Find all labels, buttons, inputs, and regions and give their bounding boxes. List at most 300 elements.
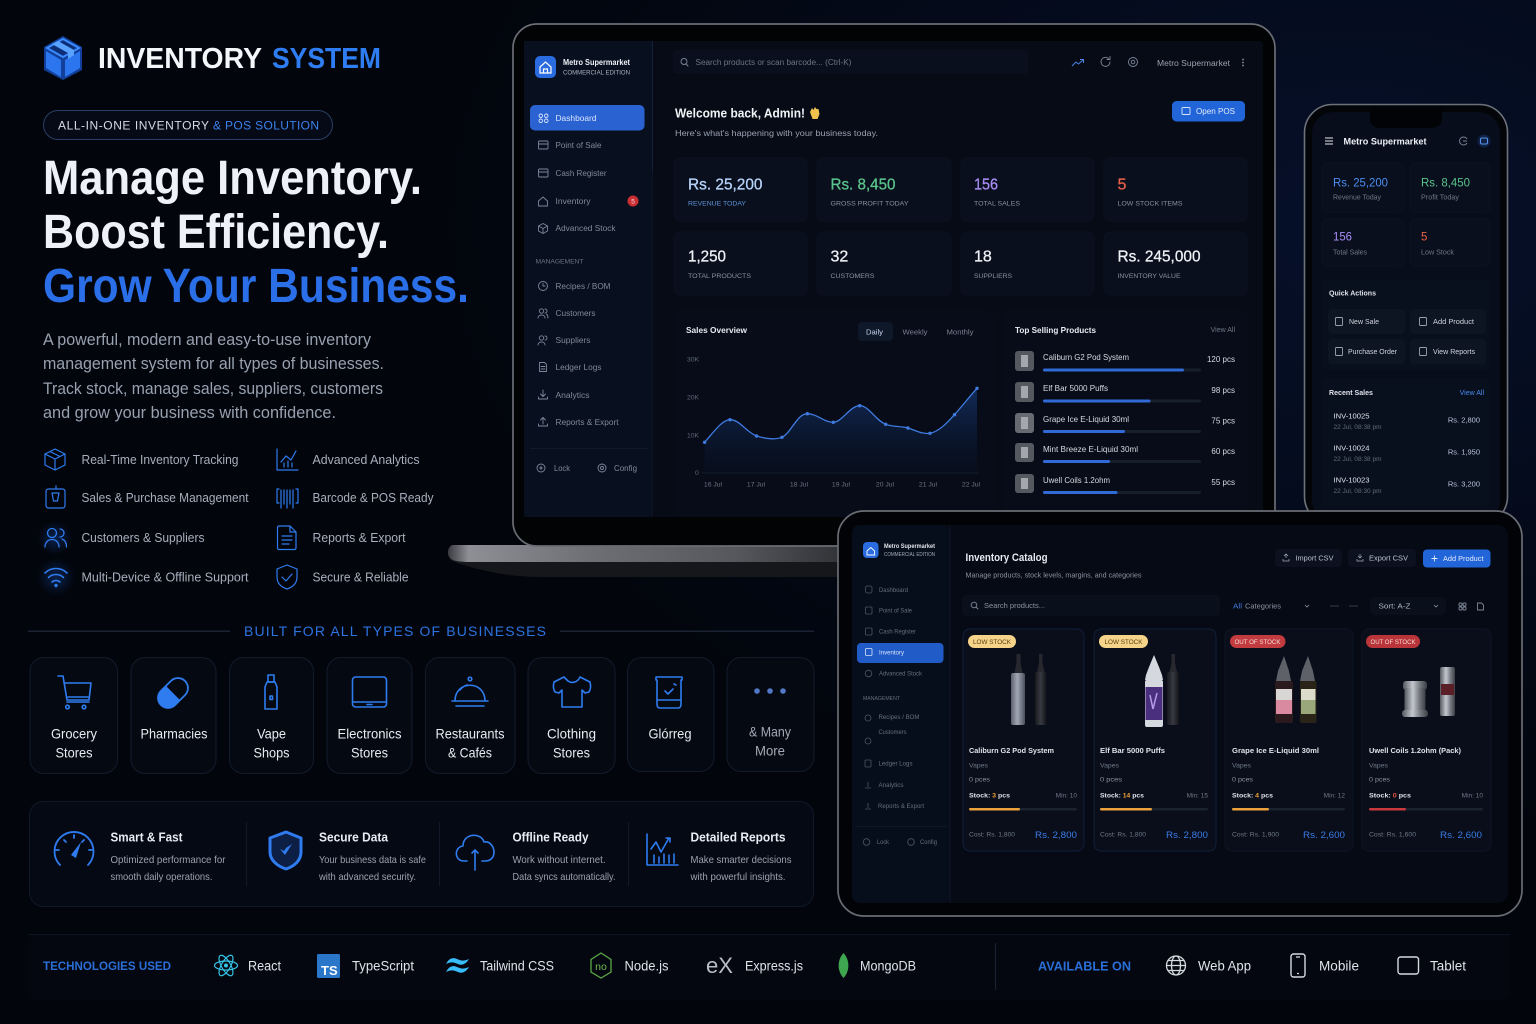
sales overview chart	[674, 310, 994, 517]
stat: total sales: 156	[974, 176, 998, 194]
phone stat: profit	[1410, 163, 1490, 212]
phone stat cards	[1322, 163, 1490, 266]
sales overview chart: 10K	[687, 432, 700, 440]
sale row 10024: INV-10024	[1334, 446, 1370, 452]
tablet menu items: Recipes / BOM	[878, 714, 920, 721]
product row: Grape Ice	[1015, 413, 1235, 433]
product card: Elf Bar: Cost: Rs. 1,800	[1100, 832, 1146, 838]
stat: total products: TOTAL PRODUCTS	[688, 273, 752, 280]
headline	[43, 152, 469, 313]
feature: inventory tracking	[45, 449, 238, 470]
top search bar	[673, 50, 1028, 74]
card: electronics stores	[327, 658, 412, 774]
product image: e-liquid bottle and pod	[1145, 654, 1179, 727]
catalog filters	[962, 595, 1484, 616]
open POS button	[1172, 101, 1245, 122]
phone stat: total sales: 156	[1333, 232, 1352, 244]
tablet sidebar: COMMERCIAL EDITION	[884, 552, 935, 558]
stat: low stock items: 5	[1118, 176, 1126, 194]
action: purchase order: Purchase Order	[1348, 349, 1398, 356]
quick actions	[1322, 280, 1490, 370]
sidebar menu items: Lock	[554, 464, 571, 473]
intro paragraph	[43, 330, 384, 422]
tablet menu items: MANAGEMENT	[863, 696, 901, 702]
product card: Uwell Coils: OUT OF STOCK	[1370, 640, 1416, 646]
stat: revenue today: REVENUE TODAY	[688, 200, 747, 208]
tech: MongoDB	[839, 953, 916, 978]
tech: TypeScript: TS	[321, 963, 338, 978]
phone stat: revenue	[1322, 163, 1404, 212]
card: clothing stores: Clothing	[547, 726, 596, 742]
tablet menu items	[855, 586, 947, 846]
tagline pill	[44, 110, 332, 140]
sales overview chart: 22 Jul	[962, 482, 981, 488]
tech: Node.js	[591, 953, 669, 978]
benefit: detailed reports: Detailed Reports	[690, 830, 786, 844]
tech: Express.js	[706, 953, 803, 978]
stat: inventory value: INVENTORY VALUE	[1118, 273, 1181, 280]
export CSV button	[1348, 549, 1416, 567]
stat cards	[674, 158, 1247, 295]
logo and brand title	[44, 36, 381, 80]
catalog heading: Manage products, stock levels, margins, and categories	[966, 572, 1142, 580]
tablet active item: inventory	[857, 643, 944, 663]
welcome heading: Here's what's happening with your business today.	[675, 128, 878, 138]
tech: React	[214, 953, 281, 978]
laptop sidebar	[524, 41, 653, 517]
feature: reports	[278, 526, 406, 550]
sidebar menu items: Suppliers	[556, 336, 590, 345]
platform: Web App: Web App	[1198, 958, 1251, 974]
top selling products: Top Selling Products	[1015, 325, 1096, 335]
laptop base	[448, 545, 860, 577]
platform: Web App	[1166, 956, 1251, 975]
action: new sale	[1328, 309, 1405, 334]
feature list	[37, 449, 434, 596]
benefit: smart and fast: Optimized performance for	[110, 854, 226, 866]
product card: Caliburn G2: Caliburn G2 Pod System	[969, 746, 1054, 755]
intro paragraph: and grow your business with confidence.	[43, 403, 336, 422]
tagline pill: & POS SOLUTION	[213, 118, 319, 132]
add product button	[1423, 550, 1490, 568]
product image: coils	[1402, 667, 1455, 717]
phone stat: low stock: Low Stock	[1421, 250, 1455, 256]
stat: suppliers	[961, 232, 1094, 295]
feature: secure: Secure & Reliable	[312, 570, 408, 584]
tablet menu items: Reports & Export	[878, 803, 924, 810]
stat: low stock items: LOW STOCK ITEMS	[1118, 200, 1183, 208]
platform: Tablet: Tablet	[1430, 958, 1466, 974]
tagline pill: ALL-IN-ONE INVENTORY	[58, 118, 209, 132]
line chart area and line	[703, 387, 979, 473]
card: clothing stores	[528, 658, 615, 774]
phone stat: profit: Rs. 8,450	[1421, 178, 1470, 190]
export CSV button: Export CSV	[1369, 556, 1408, 562]
card: restaurants and cafes: Restaurants	[436, 726, 504, 742]
stat: revenue today: Rs. 25,200	[688, 176, 763, 194]
product card: Uwell Coils: 0 pces	[1369, 776, 1391, 784]
product row: Mint Breeze: 60 pcs	[1211, 447, 1235, 456]
heading: available on: AVAILABLE ON	[1038, 958, 1131, 974]
product card: Elf Bar: Stock: 14 pcs	[1100, 792, 1144, 800]
sidebar menu items: MANAGEMENT	[536, 258, 584, 266]
benefit: detailed reports: Make smarter decisions	[690, 854, 792, 866]
sales overview chart: 21 Jul	[919, 482, 938, 488]
catalog filters: All	[1233, 604, 1243, 610]
tablet sidebar	[852, 525, 950, 903]
product card: Grape Ice	[1225, 629, 1353, 851]
product card: Caliburn G2: 0 pces	[969, 776, 991, 784]
stat: total products	[674, 232, 807, 295]
product card: Uwell Coils: Uwell Coils 1.2ohm (Pack)	[1369, 746, 1461, 755]
phone header: Metro Supermarket	[1344, 136, 1427, 148]
product card: Caliburn G2	[963, 629, 1084, 851]
product row: Elf Bar: 98 pcs	[1211, 386, 1235, 395]
product row: Grape Ice: Grape Ice E-Liquid 30ml	[1043, 415, 1129, 424]
product card: Grape Ice: 0 pces	[1232, 776, 1254, 784]
action: view reports	[1410, 339, 1486, 364]
product card: Grape Ice: Min: 12	[1324, 792, 1345, 800]
stat: inventory value: Rs. 245,000	[1118, 248, 1201, 266]
feature: analytics	[277, 449, 420, 470]
tablet menu items: Analytics	[878, 782, 904, 789]
catalog filters: Sort: A-Z	[1378, 604, 1411, 610]
sale row 10025: 22 Jul, 08:38 pm	[1334, 425, 1382, 431]
product row: Mint Breeze	[1015, 443, 1235, 463]
action: purchase order	[1328, 339, 1405, 364]
tablet menu items: Ledger Logs	[878, 760, 912, 768]
feature: customers	[38, 521, 205, 555]
sale row 10023: INV-10023	[1334, 478, 1370, 484]
top bar actions	[1072, 56, 1244, 68]
card: and many more: More	[755, 742, 785, 758]
sidebar menu items: Ledger Logs	[556, 363, 602, 372]
phone stat: low stock	[1410, 219, 1490, 266]
tablet mockup	[838, 511, 1522, 916]
product card: Grape Ice: OUT OF STOCK	[1234, 640, 1280, 646]
feature: sales and purchase: Sales & Purchase Management	[82, 490, 249, 505]
tech: Node.js: no	[595, 961, 607, 973]
product card: Elf Bar: 0 pces	[1100, 776, 1123, 784]
product row: Caliburn: Caliburn G2 Pod System	[1043, 353, 1129, 362]
phone stat: revenue: Rs. 25,200	[1333, 178, 1388, 190]
sale row 10023: Rs. 3,200	[1448, 480, 1480, 488]
headline: Boost Efficiency.	[43, 206, 389, 259]
tech: MongoDB: MongoDB	[860, 958, 916, 974]
product card: Elf Bar	[1094, 629, 1216, 851]
product card: Uwell Coils: Min: 10	[1462, 792, 1483, 800]
quick actions: Quick Actions	[1329, 290, 1376, 298]
intro paragraph: A powerful, modern and easy-to-use inventory	[43, 330, 371, 349]
sidebar menu items: Recipes / BOM	[556, 282, 611, 291]
sales overview chart: Daily	[866, 328, 883, 336]
product card: Uwell Coils: Rs. 2,600	[1440, 830, 1482, 840]
feature: barcode: Barcode & POS Ready	[312, 490, 434, 505]
laptop dashboard	[513, 24, 1275, 546]
catalog toolbar buttons	[1275, 549, 1490, 568]
card: and many more: & Many	[749, 724, 791, 740]
section heading: built for all types of businesses: BUILT FOR ALL TYPES OF BUSINESSES	[244, 623, 546, 639]
tablet sidebar: Metro Supermarket	[884, 543, 936, 550]
feature: inventory tracking: Real-Time Inventory Tracking	[82, 452, 238, 467]
benefit: offline ready	[456, 830, 616, 883]
tablet menu items: Advanced Stock	[879, 670, 923, 678]
top selling products: View All	[1211, 327, 1235, 334]
product row: Mint Breeze: Mint Breeze E-Liquid 30ml	[1043, 445, 1138, 454]
card: grocery stores	[30, 658, 118, 774]
phone mockup	[1304, 104, 1508, 524]
sale row 10023	[1334, 478, 1480, 495]
recent sales: View All	[1460, 390, 1484, 397]
sidebar menu items	[530, 141, 648, 473]
product card: Elf Bar: Elf Bar 5000 Puffs	[1100, 746, 1165, 755]
sales overview chart: Monthly	[946, 328, 974, 336]
action: add product: Add Product	[1433, 319, 1474, 326]
product card: Uwell Coils: Stock: 0 pcs	[1369, 792, 1411, 800]
card: pharmacies: Pharmacies	[140, 726, 208, 742]
product card: Elf Bar: Vapes	[1100, 762, 1120, 770]
welcome heading	[675, 106, 878, 138]
card: garbled store label: Glórreg	[648, 726, 692, 742]
phone header	[1325, 134, 1490, 148]
welcome heading: Welcome back, Admin!	[675, 106, 805, 120]
tablet menu items: Lock	[877, 839, 890, 846]
stat: gross profit: Rs. 8,450	[830, 176, 896, 194]
sidebar menu items: Advanced Stock	[556, 224, 617, 233]
stat: customers: CUSTOMERS	[830, 273, 875, 280]
sales overview chart: 20K	[687, 394, 700, 402]
benefit: offline ready: Offline Ready	[512, 830, 589, 844]
stat: suppliers: SUPPLIERS	[974, 273, 1013, 280]
product image: pod devices	[1011, 654, 1046, 725]
tech: Express.js: Express.js	[745, 958, 803, 974]
stat: customers: 32	[830, 248, 848, 266]
sales overview chart: Sales Overview	[686, 325, 747, 335]
tablet menu items: Dashboard	[879, 587, 908, 594]
tech: Node.js: Node.js	[624, 958, 669, 974]
catalog filters: Categories	[1245, 604, 1282, 610]
product card: Grape Ice: Stock: 4 pcs	[1232, 792, 1273, 800]
intro paragraph: management system for all types of businesses.	[43, 354, 384, 373]
benefit: offline ready: Data syncs automatically.	[512, 871, 616, 883]
phone stat: total sales	[1322, 219, 1404, 266]
stat: gross profit: GROSS PROFIT TODAY	[830, 200, 909, 208]
product card: Uwell Coils: Vapes	[1369, 762, 1389, 770]
sales overview chart: Weekly	[902, 328, 928, 336]
sidebar menu items: Point of Sale	[556, 141, 602, 150]
product row: Elf Bar: Elf Bar 5000 Puffs	[1043, 384, 1108, 393]
card: clothing stores: Stores	[553, 744, 590, 760]
product row: Uwell Coils: Uwell Coils 1.2ohm	[1043, 476, 1110, 485]
card: restaurants and cafes: & Cafés	[448, 744, 492, 760]
stat: total sales	[961, 158, 1094, 221]
product card: Grape Ice: Cost: Rs. 1,900	[1232, 832, 1279, 838]
product row: Grape Ice: 75 pcs	[1211, 416, 1235, 426]
tech: Tailwind CSS: Tailwind CSS	[480, 958, 554, 974]
catalog heading: Inventory Catalog	[966, 552, 1048, 564]
heading: technologies used: TECHNOLOGIES USED	[43, 959, 171, 973]
tablet menu items: Point of Sale	[879, 608, 912, 614]
benefit: secure data: Secure Data	[319, 830, 389, 844]
card: electronics stores: Stores	[351, 744, 388, 760]
product row: Elf Bar	[1015, 382, 1235, 402]
product card: Elf Bar: LOW STOCK	[1104, 640, 1142, 646]
card: and many more	[727, 658, 814, 772]
card: garbled store label	[628, 658, 714, 772]
benefit: smart and fast: smooth daily operations.	[110, 871, 212, 883]
stat: total sales: TOTAL SALES	[974, 200, 1021, 208]
benefit: secure data	[270, 830, 426, 883]
sales overview chart: 0	[695, 470, 699, 477]
icon: logo cube	[44, 36, 82, 80]
phone stat: total sales: Total Sales	[1333, 250, 1367, 256]
product row: Uwell Coils: 55 pcs	[1211, 478, 1235, 487]
top search bar: Search products or scan barcode... (Ctrl-K)	[696, 58, 852, 67]
stat: low stock items	[1104, 158, 1247, 221]
tech: TypeScript: TypeScript	[352, 958, 414, 974]
recent sales: Recent Sales	[1329, 390, 1373, 397]
card: vape shops: Shops	[254, 744, 290, 760]
sales overview chart: 30K	[687, 356, 700, 364]
product card: Caliburn G2: Cost: Rs. 1,800	[969, 832, 1015, 838]
feature: sales and purchase	[46, 486, 249, 508]
add product button: Add Product	[1443, 556, 1484, 563]
action: view reports: View Reports	[1433, 349, 1475, 356]
benefit: smart and fast: Smart & Fast	[110, 830, 183, 844]
product card: Uwell Coils	[1362, 629, 1491, 851]
sidebar logo	[535, 56, 630, 78]
product card: Elf Bar: Min: 15	[1187, 792, 1208, 800]
sale row 10025: Rs. 2,800	[1448, 416, 1480, 424]
tech: Tailwind CSS	[446, 958, 554, 974]
product card: Elf Bar: Rs. 2,800	[1166, 830, 1208, 840]
action: new sale: New Sale	[1349, 319, 1379, 326]
feature: multi-device: Multi-Device & Offline Support	[82, 570, 249, 584]
active item: dashboard	[530, 105, 644, 130]
import CSV button: Import CSV	[1296, 556, 1334, 562]
sales overview chart: 18 Jul	[790, 482, 809, 488]
platform: Tablet	[1398, 957, 1466, 974]
card: grocery stores: Stores	[56, 744, 92, 760]
benefit: secure data: with advanced security.	[318, 871, 416, 883]
product card: Caliburn G2: Rs. 2,800	[1035, 830, 1077, 840]
stat: customers	[817, 232, 951, 295]
feature: customers: Customers & Suppliers	[82, 530, 205, 545]
card: restaurants and cafes	[426, 658, 515, 774]
product card: Uwell Coils: Cost: Rs. 1,600	[1369, 832, 1416, 838]
headline: Manage Inventory.	[43, 152, 422, 205]
card: pharmacies	[131, 658, 216, 774]
benefit: detailed reports	[647, 830, 792, 883]
sidebar menu items: Reports & Export	[556, 418, 619, 427]
product card: Grape Ice: Rs. 2,600	[1303, 830, 1345, 840]
product card: Grape Ice: Grape Ice E-Liquid 30ml	[1232, 746, 1319, 755]
sales overview chart: 19 Jul	[832, 482, 851, 488]
feature: barcode	[277, 489, 434, 508]
tech: React: React	[248, 958, 281, 974]
brand name: INVENTORY	[98, 43, 262, 75]
platform: Mobile	[1291, 954, 1359, 977]
product row: Caliburn	[1015, 351, 1235, 372]
phone stat: low stock: 5	[1421, 232, 1427, 244]
business type cards	[30, 658, 814, 774]
card: grocery stores: Grocery	[51, 726, 97, 742]
sale row 10024	[1334, 446, 1480, 463]
feature: analytics: Advanced Analytics	[312, 452, 420, 467]
intro paragraph: Track stock, manage sales, suppliers, customers	[43, 379, 383, 398]
card: vape shops	[230, 658, 314, 774]
top selling products	[1003, 310, 1247, 517]
product image: two e-liquid bottles	[1275, 656, 1316, 723]
feature: reports: Reports & Export	[312, 530, 406, 545]
platform: Mobile: Mobile	[1319, 958, 1359, 974]
technologies and platforms bar	[28, 934, 1510, 1000]
sale row 10024: Rs. 1,950	[1448, 448, 1480, 456]
stat: revenue today	[674, 158, 807, 221]
tablet menu items: Customers	[878, 729, 906, 736]
sidebar menu items: Customers	[556, 309, 596, 318]
product card: Caliburn G2: Min: 10	[1056, 792, 1077, 800]
sidebar logo: COMMERCIAL EDITION	[563, 70, 630, 76]
sidebar menu items: Config	[614, 464, 637, 473]
import CSV button	[1275, 549, 1342, 567]
top bar actions: Metro Supermarket	[1157, 59, 1231, 68]
sidebar menu items: Inventory	[556, 197, 590, 206]
benefits panel	[30, 802, 814, 906]
logo and brand title: SYSTEM	[272, 43, 381, 75]
product card: Caliburn G2: Stock: 3 pcs	[969, 792, 1010, 800]
sidebar menu items: Analytics	[556, 391, 590, 400]
feature: multi-device	[37, 558, 249, 596]
stat: gross profit	[817, 158, 951, 221]
sale row 10025: INV-10025	[1334, 414, 1370, 420]
icon: waving hand	[810, 107, 820, 119]
sidebar logo: Metro Supermarket	[563, 58, 630, 67]
catalog heading	[966, 552, 1142, 580]
product card: Caliburn G2: LOW STOCK	[973, 640, 1011, 646]
sale row 10023: 22 Jul, 08:30 pm	[1334, 489, 1382, 495]
tech: TypeScript	[317, 954, 414, 978]
sidebar menu items: 5	[631, 198, 635, 206]
open POS button: Open POS	[1196, 107, 1235, 116]
catalog filters: Search products...	[984, 603, 1045, 610]
feature: secure	[277, 565, 408, 589]
headline: Grow Your Business.	[43, 260, 469, 313]
stat: inventory value	[1104, 232, 1247, 295]
card: electronics stores: Electronics	[338, 726, 402, 742]
benefit: detailed reports: with powerful insights.	[690, 871, 786, 883]
tablet menu items: Config	[920, 839, 937, 846]
product row: Uwell Coils	[1015, 474, 1235, 494]
tablet menu items: Cash Register	[879, 628, 916, 636]
phone stat: profit: Profit Today	[1421, 194, 1460, 202]
stat: total products: 1,250	[688, 248, 726, 266]
sales overview chart: 16 Jul	[704, 482, 723, 488]
tech: Express.js: eX	[706, 953, 733, 978]
product row: Caliburn: 120 pcs	[1207, 355, 1235, 364]
phone stat: revenue: Revenue Today	[1333, 194, 1381, 202]
active item: dashboard: Dashboard	[556, 114, 596, 123]
recent sales	[1322, 378, 1490, 506]
product card: Caliburn G2: Vapes	[969, 762, 989, 770]
sale row 10024: 22 Jul, 08:38 pm	[1334, 457, 1382, 463]
card: vape shops: Vape	[257, 726, 286, 742]
benefit: smart and fast	[55, 830, 226, 883]
tablet active item: inventory: Inventory	[879, 650, 905, 656]
sales overview chart: 17 Jul	[747, 482, 766, 488]
sales overview chart: 20 Jul	[876, 482, 895, 488]
sidebar menu items: Cash Register	[556, 169, 607, 178]
